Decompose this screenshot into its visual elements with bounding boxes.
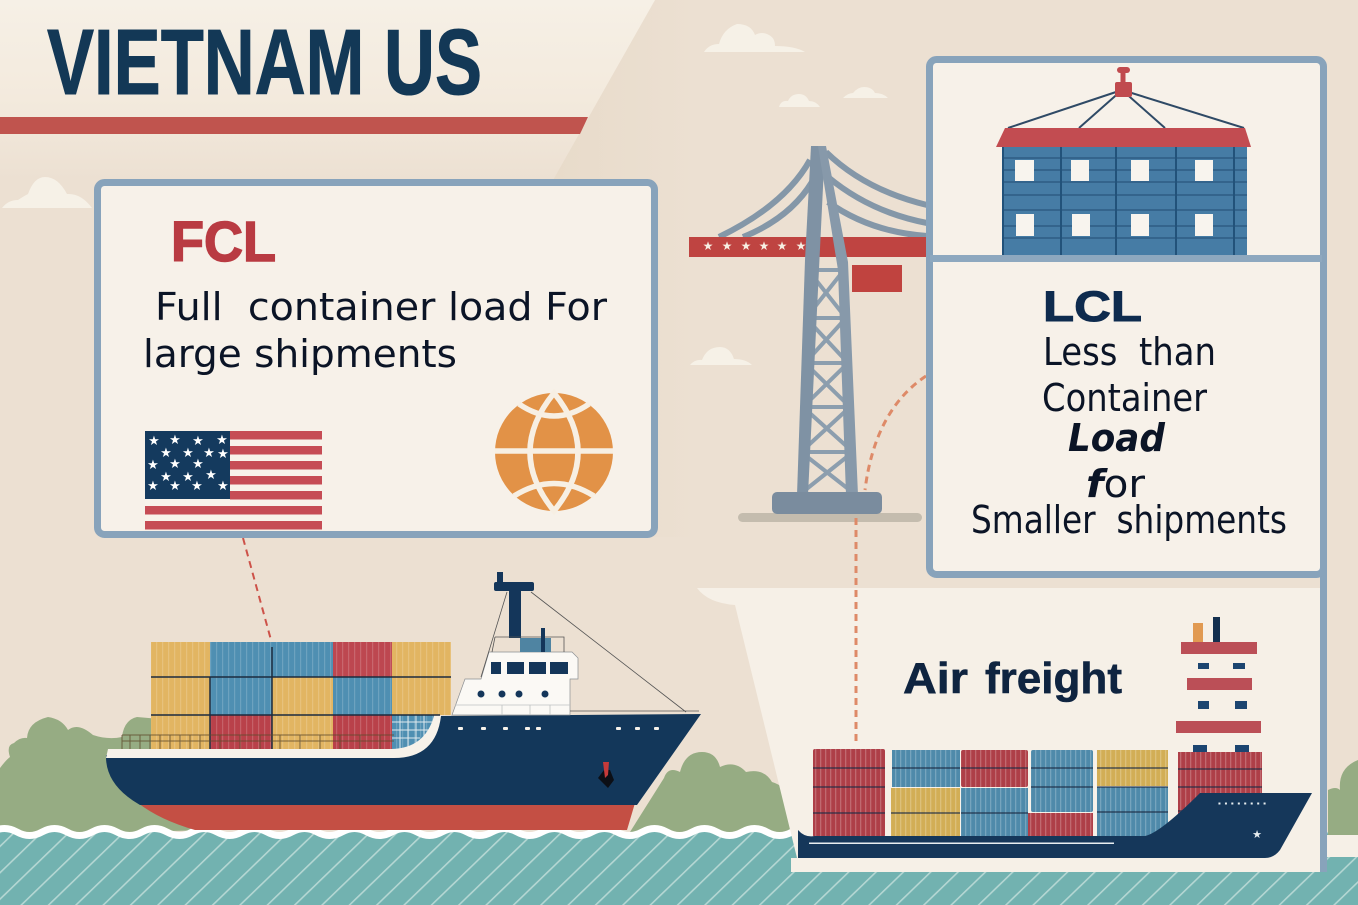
base shadow — [738, 513, 922, 522]
tower — [772, 146, 882, 514]
white sheer line — [106, 716, 441, 758]
icon: US flag: ★ — [217, 479, 229, 494]
air freight heading: Air — [903, 654, 968, 703]
LCL description: Load — [1068, 416, 1166, 460]
panel: air freight — [697, 560, 1358, 872]
icon: US flag: ★ — [203, 446, 215, 461]
air freight heading — [903, 654, 1122, 703]
funnel stack — [1176, 617, 1261, 752]
FCL description: Full container load For — [155, 285, 607, 329]
hull details — [809, 799, 1266, 844]
FCL description: large shipments — [143, 332, 457, 376]
water — [0, 828, 1358, 905]
icon: US flag: ★ — [192, 457, 204, 472]
portholes — [458, 727, 659, 730]
orange dashed connectors — [856, 376, 926, 746]
LCL description: Container — [1042, 376, 1207, 420]
hanging container — [852, 265, 902, 292]
cranes — [689, 146, 927, 522]
icon: US flag: ★ — [169, 433, 181, 448]
cream strip right — [1327, 835, 1358, 857]
hull details: ▪▪▪▪▪▪▪▪ — [1218, 799, 1266, 808]
icon: US flag: ★ — [191, 479, 203, 494]
jib stars: ★ — [777, 239, 787, 253]
crane jib — [689, 237, 927, 257]
LCL description: Less than — [1043, 330, 1216, 374]
bridge rail and wires — [481, 592, 699, 712]
superstructure — [452, 652, 578, 715]
bridge top box — [520, 628, 551, 652]
jib stars — [703, 239, 806, 253]
air freight heading: freight — [985, 654, 1122, 703]
jib stars: ★ — [703, 239, 713, 253]
icon: US flag: ★ — [182, 446, 194, 461]
icon: US flag: ★ — [205, 468, 217, 483]
title underline bar — [0, 117, 588, 134]
icon: US flag: ★ — [160, 446, 172, 461]
icon: US flag: ★ — [169, 457, 181, 472]
icon: globe — [495, 393, 613, 511]
LCL description: Smaller shipments — [971, 498, 1287, 542]
jib stars: ★ — [759, 239, 769, 253]
red dashed connector — [243, 538, 271, 640]
red underwater hull — [138, 803, 635, 830]
LCL description — [971, 330, 1287, 542]
icon: US flag: ★ — [192, 434, 204, 449]
far right bush — [1328, 760, 1358, 835]
clouds — [2, 24, 888, 365]
jib stars: ★ — [722, 239, 732, 253]
divider — [930, 255, 1322, 262]
icon: US flag: ★ — [217, 447, 229, 462]
deck railing — [122, 735, 394, 749]
icon: US flag: ★ — [147, 458, 159, 473]
icon: US flag: ★ — [147, 479, 159, 494]
jib stars: ★ — [741, 239, 751, 253]
icon: US flag: ★ — [160, 470, 172, 485]
anchor — [598, 762, 614, 788]
icon: US flag: ★ — [148, 434, 160, 449]
hull details: ★ — [1252, 828, 1262, 841]
icon: US flag: ★ — [169, 479, 181, 494]
title: VIETNAM US — [47, 10, 482, 114]
mast — [494, 572, 534, 638]
navy hull — [106, 714, 701, 805]
warehouse building — [996, 67, 1251, 255]
main container ship — [106, 572, 701, 830]
bushes — [0, 717, 800, 835]
FCL panel — [98, 182, 654, 534]
container stacks — [813, 749, 1262, 837]
panel: LCL — [930, 60, 1324, 574]
cargo ship hull — [798, 793, 1312, 858]
LCL description: for — [1086, 462, 1145, 506]
icon: US flag — [145, 431, 322, 530]
crane cables — [719, 152, 927, 237]
FCL heading: FCL — [171, 210, 276, 274]
containers — [151, 642, 451, 749]
LCL heading: LCL — [1043, 283, 1142, 331]
right rail — [1320, 560, 1327, 872]
jib stars: ★ — [796, 239, 806, 253]
icon: US flag: ★ — [182, 470, 194, 485]
FCL description — [143, 285, 607, 376]
icon: US flag: ★ — [216, 433, 228, 448]
